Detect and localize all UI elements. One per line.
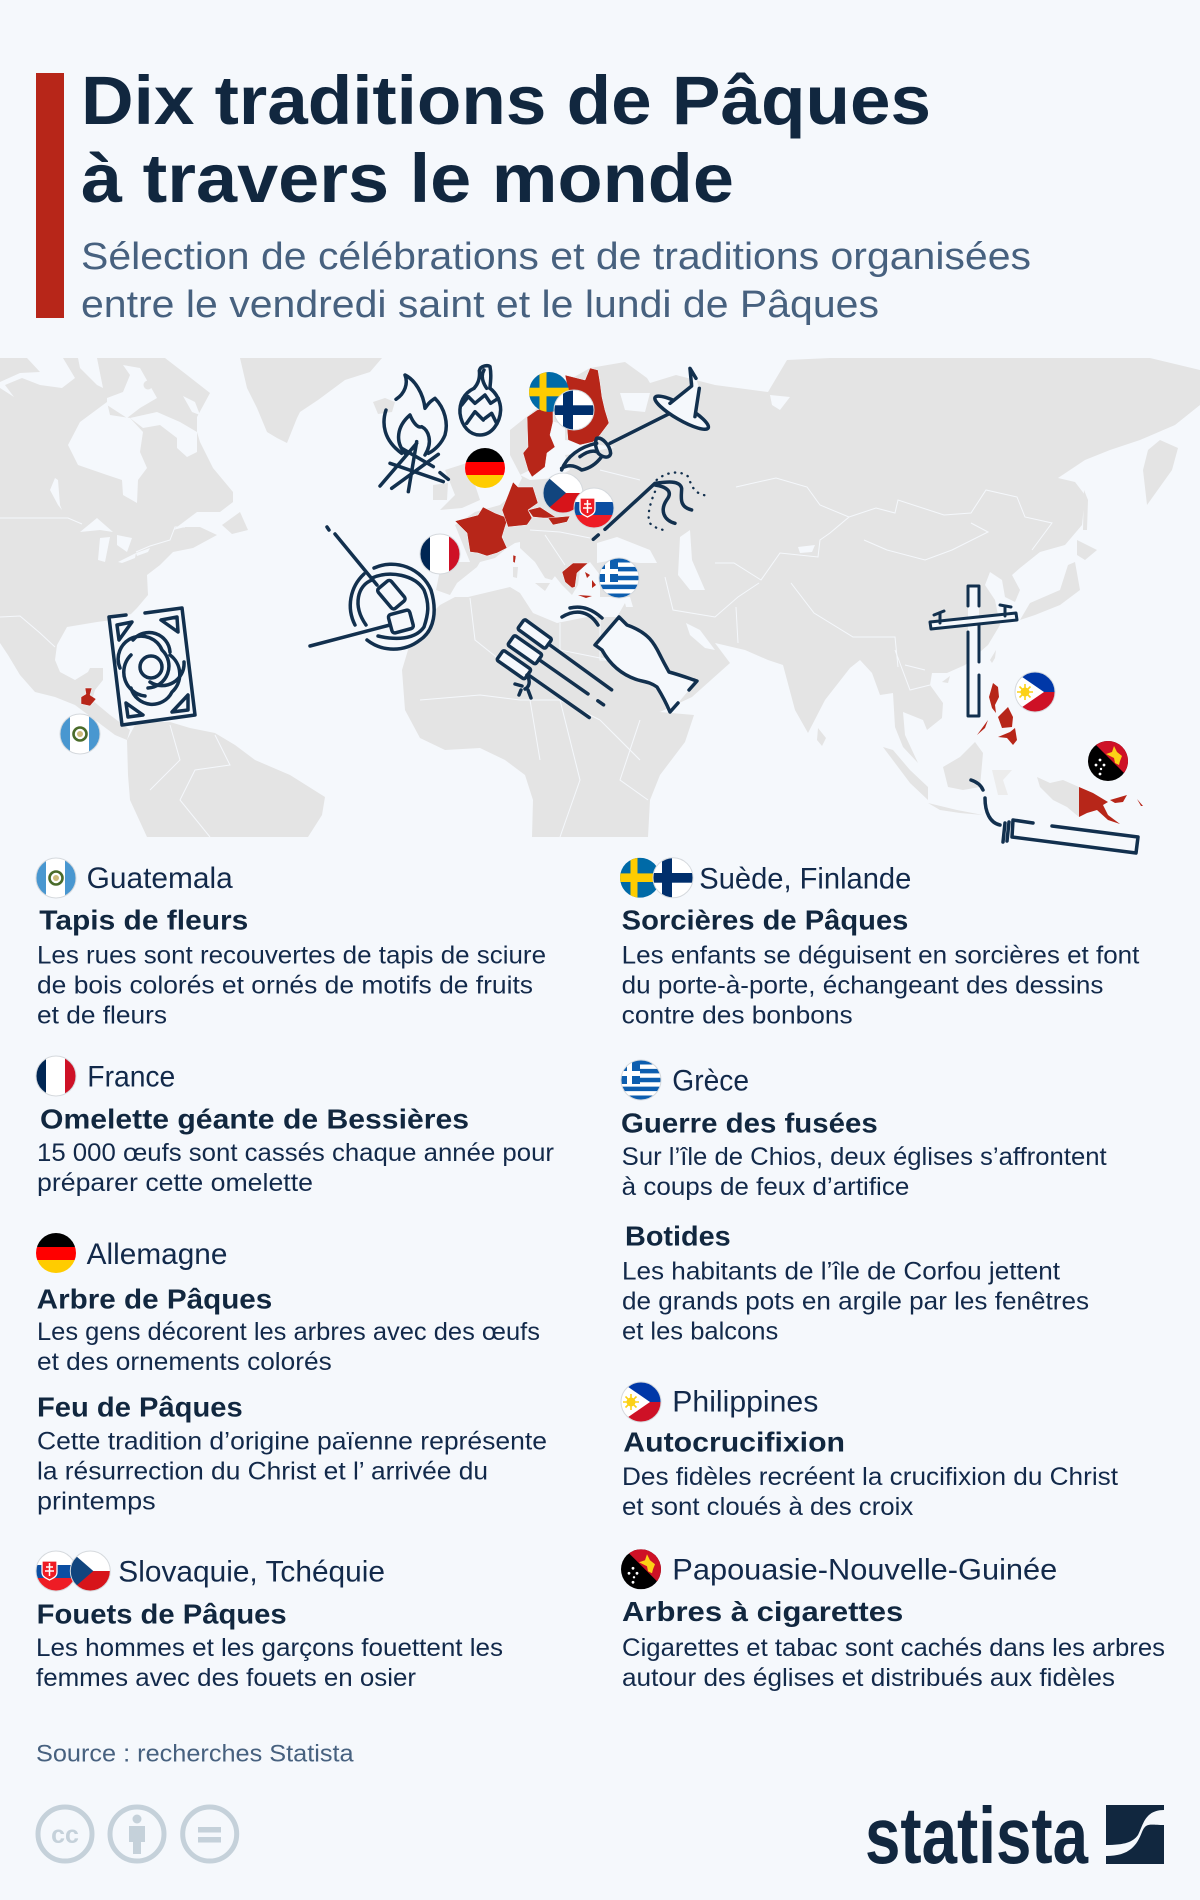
heading: Arbre de Pâques: Arbre de Pâques xyxy=(37,1283,272,1314)
icon: cross xyxy=(930,586,1017,716)
flag: Germany xyxy=(465,448,505,488)
icon: whip xyxy=(593,473,708,539)
text: Botides: de grands pots en argile par les fenêtres xyxy=(622,1287,1089,1315)
flag: France xyxy=(36,1056,76,1096)
icon: no derivatives xyxy=(183,1807,237,1861)
country: Guatemala xyxy=(81,688,96,706)
text: omelette: préparer cette omelette xyxy=(37,1169,313,1197)
country name: Papouasie-Nouvelle-Guinée: Papouasie-Nouvelle-Guinée xyxy=(672,1553,1057,1586)
text: Botides: et les balcons xyxy=(622,1317,778,1345)
heading: Omelette géante de Bessières: Omelette géante de Bessières xyxy=(40,1103,469,1134)
icon: Statista mark xyxy=(1106,1805,1164,1864)
text: Fouets de Pâques xyxy=(36,1634,503,1692)
country name: Philippines: Philippines xyxy=(672,1386,818,1419)
flag: Papua New Guinea xyxy=(1088,741,1128,781)
flag: Sweden xyxy=(529,372,569,412)
text: Feu de Pâques: printemps xyxy=(37,1487,156,1515)
flag: Czechia xyxy=(543,473,583,513)
country name: Allemagne: Allemagne xyxy=(87,1238,227,1271)
highlighted countries xyxy=(81,368,1143,824)
text: omelette xyxy=(37,1139,554,1197)
flag: Guatemala xyxy=(60,714,100,754)
island in Foxe Basin xyxy=(144,380,152,390)
icon: witch hat and broom xyxy=(562,368,712,470)
icon: clay pot shards xyxy=(562,607,697,712)
country: Corsica xyxy=(513,555,516,563)
flag: Finland xyxy=(554,390,594,430)
icon: Easter egg ornament xyxy=(460,366,501,435)
panel: Philippines xyxy=(621,1382,1118,1521)
country name: France: France xyxy=(87,1061,175,1094)
flag: Slovakia xyxy=(574,488,614,528)
inland seas and channels xyxy=(0,358,815,650)
land masses xyxy=(0,358,1200,837)
text: Arbres à cigarettes: autour des églises et distribués aux fidèles xyxy=(622,1664,1115,1692)
text: Arbre de Pâques: et des ornements colorés xyxy=(37,1348,332,1376)
text: Feu de Pâques: Cette tradition d’origine païenne représente xyxy=(37,1427,547,1455)
country: Czechia xyxy=(528,507,557,518)
title xyxy=(81,62,931,217)
panel: Slovaquie, Tchéquie xyxy=(36,1551,503,1692)
text: Tapis de fleurs: de bois colorés et ornés de motifs de fruits xyxy=(37,971,533,999)
subtitle xyxy=(81,236,1031,326)
country: Sweden xyxy=(523,405,555,477)
flag: Germany xyxy=(36,1233,76,1273)
heading: Guerre des fusées: Guerre des fusées xyxy=(621,1108,878,1139)
country: Finland xyxy=(565,368,609,445)
flag: Philippines xyxy=(1015,672,1055,712)
heading: Arbres à cigarettes: Arbres à cigarettes xyxy=(622,1596,903,1627)
panel: Guatemala xyxy=(36,858,546,1029)
country name: Guatemala: Guatemala xyxy=(87,862,233,895)
text: Guerre des fusées xyxy=(622,1143,1107,1201)
country borders xyxy=(0,470,1052,837)
icon: Easter fire xyxy=(380,375,448,492)
heading: Fouets de Pâques: Fouets de Pâques xyxy=(37,1598,287,1629)
text: Arbre de Pâques xyxy=(37,1318,540,1376)
panel: Papouasie-Nouvelle-Guinée xyxy=(621,1549,1165,1692)
text: Sorcières de Pâques xyxy=(622,941,1139,1029)
title: à travers le monde xyxy=(81,140,734,217)
flag: Czechia xyxy=(70,1551,110,1591)
flag: Greece xyxy=(621,1060,661,1100)
icon: flower carpet card xyxy=(109,608,195,725)
text: Feu de Pâques xyxy=(37,1427,547,1515)
flag: Greece xyxy=(599,558,639,598)
text: Feu de Pâques: la résurrection du Christ et l’ arrivée du xyxy=(37,1457,488,1485)
text: Autocrucifixion: et sont cloués à des croix xyxy=(622,1493,914,1521)
text: Sorcières de Pâques: Les enfants se déguisent en sorcières et font xyxy=(622,941,1139,969)
panel: France xyxy=(36,1056,554,1197)
flag: France xyxy=(420,534,460,574)
country name: Grèce: Grèce xyxy=(672,1065,749,1098)
panel: Suède, Finlande xyxy=(620,858,1139,1029)
source: Source : recherches Statista xyxy=(36,1741,354,1768)
text: Arbres à cigarettes: Cigarettes et tabac sont cachés dans les arbres xyxy=(622,1634,1165,1662)
heading: Tapis de fleurs: Tapis de fleurs xyxy=(39,904,248,935)
country name: Slovaquie, Tchéquie: Slovaquie, Tchéquie xyxy=(118,1556,385,1589)
text: omelette: 15 000 œufs sont cassés chaque année pour xyxy=(37,1139,554,1167)
text: Autocrucifixion: Des fidèles recréent la crucifixion du Christ xyxy=(622,1463,1118,1491)
flag: Finland xyxy=(653,858,693,898)
text: Tapis de fleurs: et de fleurs xyxy=(37,1001,167,1029)
flag: Slovakia xyxy=(36,1551,76,1591)
icon: rockets xyxy=(497,619,615,722)
text: Sorcières de Pâques: du porte-à-porte, échangeant des dessins xyxy=(622,971,1103,999)
islands: Greece xyxy=(578,572,596,598)
world map xyxy=(0,358,1200,837)
country: Greece xyxy=(562,563,588,588)
country: Slovakia xyxy=(548,516,570,525)
flag: Guatemala xyxy=(36,858,76,898)
flag: Philippines xyxy=(621,1382,661,1422)
title accent bar xyxy=(36,73,64,318)
country: Philippines xyxy=(977,683,1017,745)
heading: Sorcières de Pâques: Sorcières de Pâques xyxy=(622,904,908,935)
flag: Papua New Guinea xyxy=(621,1549,661,1589)
heading: Botides: Botides xyxy=(625,1221,731,1252)
subtitle: entre le vendredi saint et le lundi de Pâques xyxy=(81,284,879,326)
flag: Sweden xyxy=(620,858,660,898)
icon: cigarette xyxy=(971,780,1138,853)
text: Guerre des fusées: à coups de feux d’artifice xyxy=(622,1173,909,1201)
country: Germany xyxy=(502,482,538,527)
heading: Feu de Pâques: Feu de Pâques xyxy=(37,1392,243,1423)
icon: giant omelette pan xyxy=(310,527,434,649)
country name: Suède, Finlande: Suède, Finlande xyxy=(699,862,911,895)
text: Arbres à cigarettes xyxy=(622,1634,1165,1692)
panel: Allemagne xyxy=(36,1233,547,1515)
text: Fouets de Pâques: Les hommes et les garçons fouettent les xyxy=(36,1634,503,1662)
subtitle: Sélection de célébrations et de traditions organisées xyxy=(81,236,1031,278)
icon: creative commons: cc xyxy=(51,1821,79,1849)
logo: Statista: statista xyxy=(865,1791,1088,1880)
text: Autocrucifixion xyxy=(622,1463,1118,1521)
text: Botides: Les habitants de l’île de Corfou jettent xyxy=(622,1257,1060,1285)
country: France xyxy=(455,507,508,556)
icon: creative commons xyxy=(38,1807,92,1861)
text: Sorcières de Pâques: contre des bonbons xyxy=(622,1001,853,1029)
text: Tapis de fleurs xyxy=(37,941,546,1029)
heading: Autocrucifixion: Autocrucifixion xyxy=(623,1427,845,1458)
panel: Grèce xyxy=(621,1060,1107,1345)
text: Arbre de Pâques: Les gens décorent les arbres avec des œufs xyxy=(37,1318,540,1346)
text: Tapis de fleurs: Les rues sont recouvertes de tapis de sciure xyxy=(37,941,546,969)
icon: attribution xyxy=(110,1807,164,1861)
title: Dix traditions de Pâques xyxy=(81,62,931,139)
text: Botides xyxy=(622,1257,1089,1345)
country: Papua New Guinea xyxy=(1079,787,1143,824)
text: Guerre des fusées: Sur l’île de Chios, deux églises s’affrontent xyxy=(622,1143,1107,1171)
text: Fouets de Pâques: femmes avec des fouets en osier xyxy=(36,1664,416,1692)
